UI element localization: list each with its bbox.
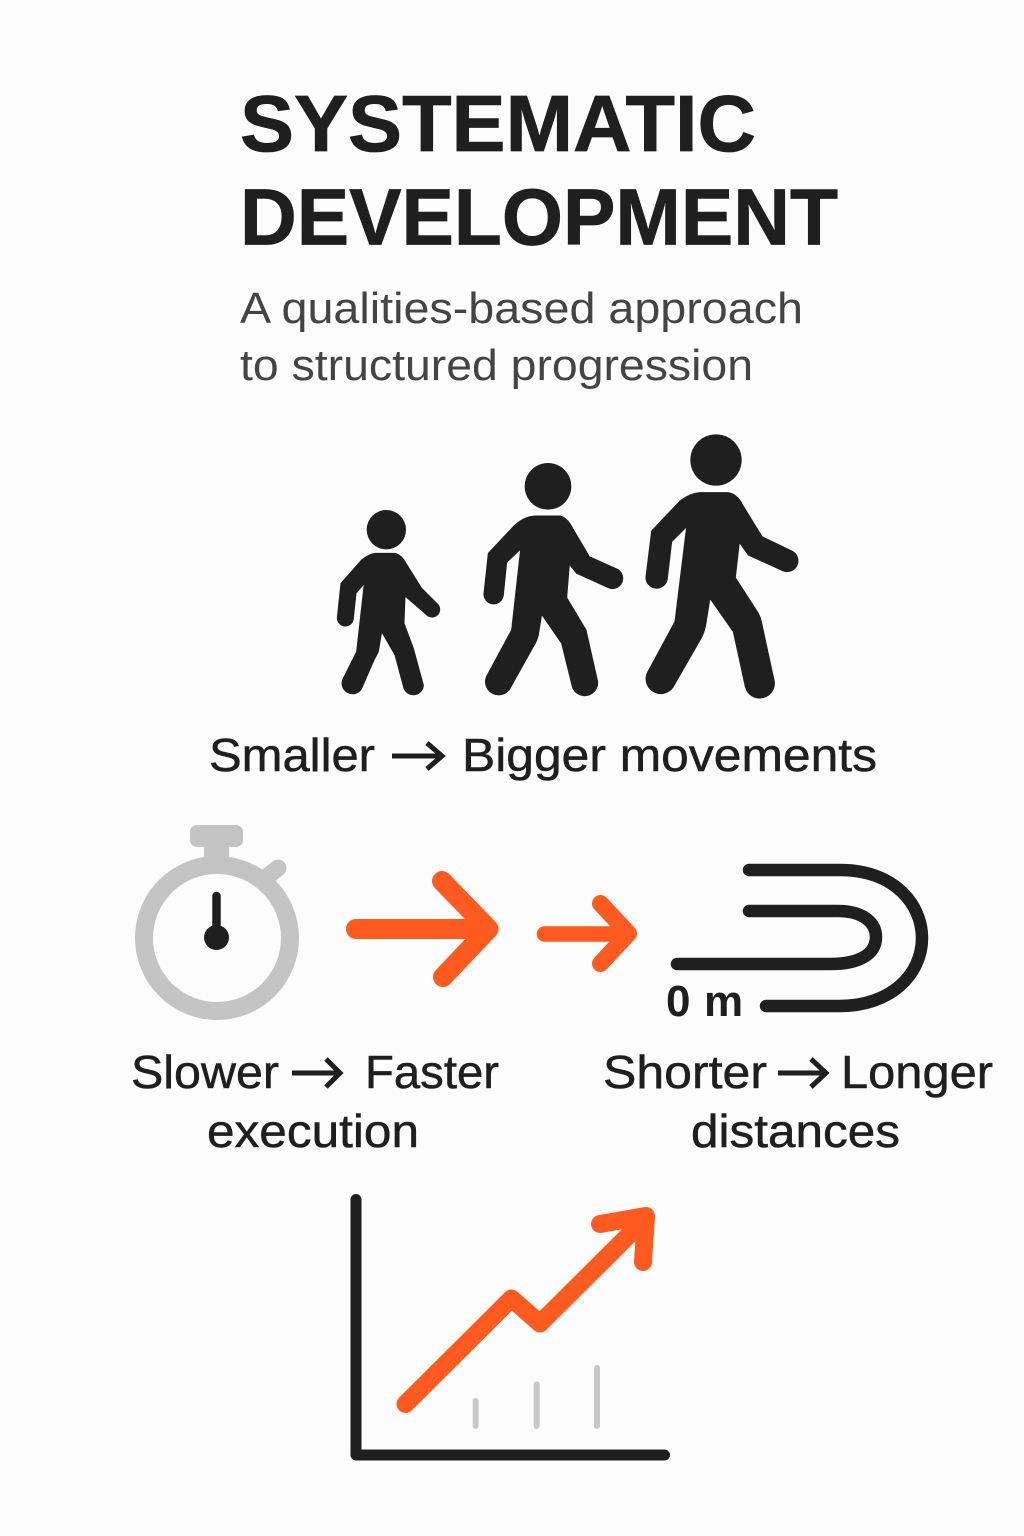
caption: execution: Slower <box>131 1046 279 1098</box>
icon: track with distance: m <box>704 977 743 1026</box>
caption: distances: Shorter <box>603 1046 767 1098</box>
icon: large figure <box>646 434 798 698</box>
icon: medium figure <box>484 463 623 696</box>
icon: stopwatch <box>144 825 290 1011</box>
subtitle: to structured progression <box>240 341 753 390</box>
caption: execution: Faster <box>365 1046 499 1098</box>
chart: progression line graph <box>356 1200 664 1455</box>
title: SYSTEMATIC <box>240 79 756 168</box>
caption: distances <box>603 1046 993 1157</box>
arrow: slower to faster <box>292 1059 340 1087</box>
subtitle <box>240 284 803 390</box>
caption: movements: Smaller <box>209 729 375 781</box>
arrow: shorter to longer <box>778 1059 826 1087</box>
chart bars <box>476 1368 597 1426</box>
icon: track with distance <box>666 870 922 1026</box>
caption: distances: distances <box>691 1105 900 1157</box>
chart trend arrow <box>406 1216 646 1404</box>
title: DEVELOPMENT <box>240 172 838 262</box>
arrow: smaller to bigger <box>392 743 442 769</box>
caption: movements <box>209 729 877 781</box>
arrow: small orange <box>544 904 628 964</box>
icon: small figure <box>337 510 440 695</box>
title <box>240 79 838 262</box>
arrow: large orange <box>356 881 488 977</box>
icon: three walking figures growing in size <box>337 434 798 698</box>
caption: execution: execution <box>207 1105 419 1157</box>
caption: execution <box>131 1046 499 1157</box>
chart axes <box>356 1200 664 1455</box>
subtitle: A qualities-based approach <box>240 284 803 333</box>
caption: movements: Bigger movements <box>462 729 877 781</box>
icon: track with distance: 0 <box>666 977 690 1026</box>
caption: distances: Longer <box>841 1046 993 1098</box>
